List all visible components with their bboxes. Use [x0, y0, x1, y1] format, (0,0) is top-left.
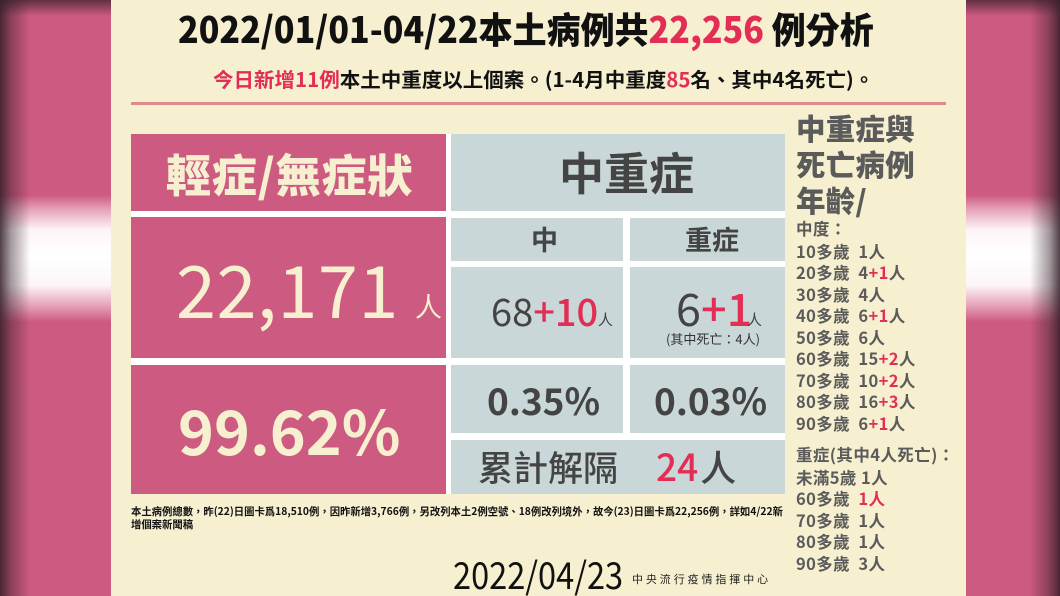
moderate age list: 30多歲 4人: [796, 282, 885, 306]
panel: moderate label: 中: [531, 219, 558, 258]
panel: severe count: [630, 267, 785, 358]
severe age list: 90多歲 3人: [796, 551, 885, 575]
panel: moderate count: 68+10: [491, 282, 598, 337]
severe age list: 重症(其中4人死亡)：: [796, 442, 955, 466]
severe age list: 未滿5歲 1人: [796, 465, 888, 489]
panel: released from isolation: [451, 440, 785, 494]
severe age list: [796, 442, 955, 575]
panel: severe header: [451, 134, 785, 211]
panel: released from isolation: 24人: [656, 438, 736, 492]
side panel: age breakdown heading: 中重症與: [796, 107, 915, 149]
footnote: [131, 504, 783, 532]
moderate age list: 中度：: [796, 216, 847, 240]
severe age list: 60多歲 1人: [796, 486, 885, 510]
panel: mild count: [131, 217, 446, 358]
footnote: 增個案新聞稿: [131, 517, 193, 532]
panel: severe label: 重症: [685, 219, 739, 258]
panel: moderate percent: 0.35%: [487, 372, 600, 426]
moderate age list: [796, 216, 916, 435]
footnote: 本土病例總數，昨(22)日圖卡爲18,510例，因昨新增3,766例，另改列本土2例空號、18例改列境外，故今(23)日圖卡爲22,256例，詳如4/22新: [131, 504, 783, 519]
source agency: 中央流行疫情指揮中心: [632, 571, 771, 587]
panel: severe percent: 0.03%: [654, 372, 767, 426]
panel: mild header: [131, 134, 446, 211]
panel: severe count: 人: [747, 309, 762, 330]
moderate age list: 90多歲 6+1人: [796, 411, 906, 435]
panel: moderate count: [451, 267, 623, 358]
side panel: age breakdown heading: 死亡病例: [796, 143, 915, 185]
moderate age list: 20多歲 4+1人: [796, 260, 906, 284]
panel: mild percent: [131, 365, 446, 494]
moderate age list: 70多歲 10+2人: [796, 368, 916, 392]
table backing: [131, 134, 785, 494]
title: 2022/01/01-04/22本土病例共22,256 例分析: [178, 2, 874, 54]
moderate age list: 80多歲 16+3人: [796, 389, 916, 413]
panel: mild count: 22,171: [176, 234, 399, 339]
panel: severe count: (其中死亡：4人): [666, 329, 760, 348]
panel: severe count: 6+1: [676, 274, 752, 339]
panel: moderate count: 人: [598, 309, 613, 330]
panel: moderate percent: [451, 365, 623, 433]
severe age list: 70多歲 1人: [796, 508, 885, 532]
moderate age list: 50多歲 6人: [796, 325, 885, 349]
panel: severe label: [630, 218, 785, 261]
panel: mild header: 輕症/無症狀: [166, 140, 413, 205]
panel: mild percent: 99.62%: [178, 384, 401, 473]
moderate age list: 10多歲 1人: [796, 239, 885, 263]
panel: mild count: 人: [415, 286, 442, 325]
panel: moderate label: [451, 218, 623, 261]
side panel: age breakdown heading: [796, 107, 915, 221]
severe age list: 80多歲 1人: [796, 529, 885, 553]
moderate age list: 40多歲 6+1人: [796, 303, 906, 327]
subtitle: 今日新增11例本土中重度以上個案。(1-4月中重度85名、其中4名死亡)。: [213, 64, 874, 93]
side panel: age breakdown heading: 年齡/: [796, 179, 867, 221]
moderate age list: 60多歲 15+2人: [796, 346, 916, 370]
panel: severe percent: [630, 365, 785, 433]
panel: released from isolation: 累計解隔: [478, 441, 618, 492]
divider: [131, 102, 946, 105]
panel: severe header: 中重症: [559, 138, 694, 203]
